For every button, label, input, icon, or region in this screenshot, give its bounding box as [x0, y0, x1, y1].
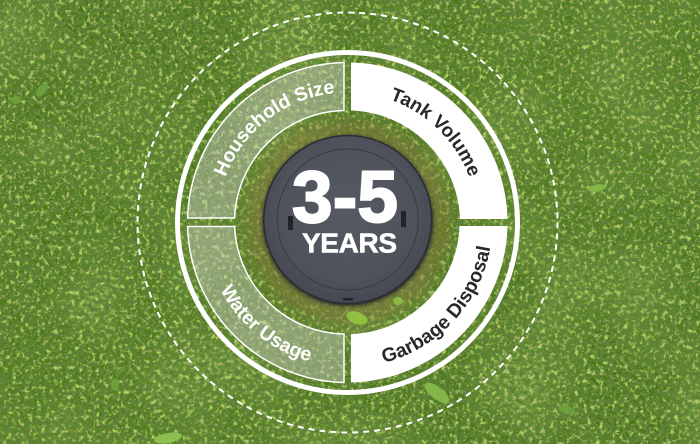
panel: household size: [186, 62, 345, 219]
label: Tank Volume: Tank Volume: [394, 87, 478, 176]
panel: water usage: [186, 226, 345, 384]
icon: septic tank lid: [263, 136, 433, 306]
dashed outer circle: [138, 12, 558, 432]
label: Household Size: Household Size: [214, 83, 334, 176]
heading: YEARS: YEARS: [302, 228, 397, 258]
label: Garbage Disposal: Garbage Disposal: [382, 246, 490, 362]
panel: tank volume: [351, 62, 508, 219]
panel: garbage disposal: [351, 226, 508, 382]
solid white ring: [178, 52, 518, 392]
icon: scattered leaves: [11, 81, 665, 444]
heading: 3-5: 3-5: [292, 157, 398, 238]
label: Water Usage: Water Usage: [222, 282, 311, 360]
